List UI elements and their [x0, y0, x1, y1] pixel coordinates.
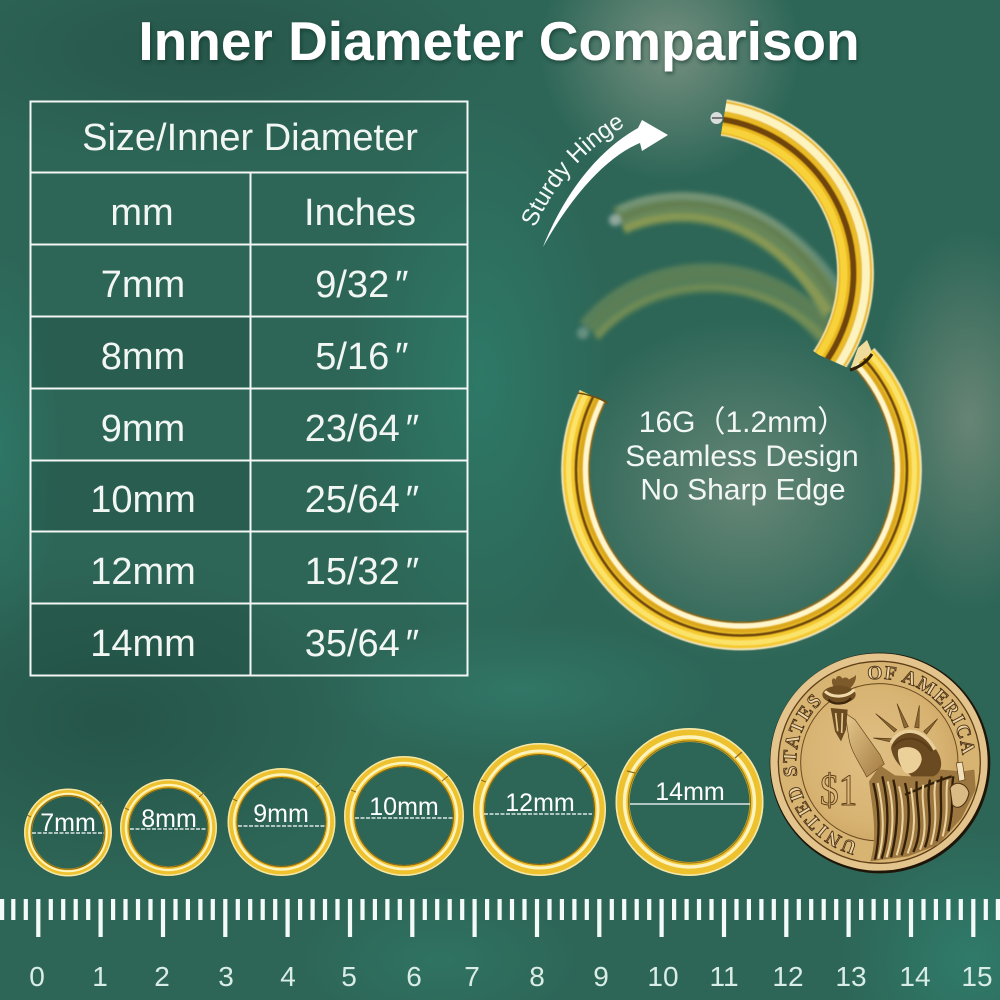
title: Inner Diameter Comparison — [138, 10, 860, 72]
upper hinged arm — [720, 98, 875, 368]
tablet and hand — [950, 762, 969, 807]
table text: 25/64″ — [305, 479, 419, 521]
table text: 5/16″ — [315, 336, 408, 378]
ring 12mm: 12mm — [505, 789, 575, 817]
coin inner field — [801, 684, 958, 841]
table text: 8mm — [101, 336, 185, 378]
table text: 15/32″ — [305, 551, 419, 593]
table text: Size/Inner Diameter — [82, 117, 418, 159]
ruler numbers: 13 — [835, 961, 867, 992]
ruler numbers: 2 — [154, 961, 170, 992]
ring 7mm: 7mm — [40, 809, 96, 837]
hinge joint — [850, 340, 872, 370]
ring 9mm: 9mm — [253, 800, 309, 828]
icon: curved arrow — [543, 120, 668, 247]
ring description: No Sharp Edge — [640, 474, 846, 506]
ruler numbers: 5 — [341, 961, 357, 992]
torch — [822, 675, 856, 741]
lower ring body — [560, 348, 923, 652]
ring 9mm — [228, 769, 335, 875]
size table — [30, 102, 468, 676]
ring 12mm — [474, 744, 605, 875]
table text: 9/32″ — [315, 264, 408, 306]
ring 14mm: 14mm — [655, 778, 725, 806]
coin value: $1 — [820, 766, 857, 815]
table text: Inches — [304, 192, 416, 234]
ruler ticks — [2, 899, 998, 937]
ruler numbers: 6 — [406, 961, 422, 992]
ring 8mm: 8mm — [141, 805, 197, 833]
statue of liberty — [822, 675, 976, 861]
sturdy hinge arrow — [522, 117, 668, 247]
table text: 10mm — [90, 479, 196, 521]
ring 10mm: 10mm — [369, 793, 439, 821]
one dollar coin — [770, 652, 990, 874]
motion ghost arcs — [577, 196, 845, 339]
robes — [869, 765, 976, 861]
large hinged ring — [523, 98, 921, 649]
ghost arc lower — [577, 272, 830, 339]
table text: 14mm — [90, 623, 196, 665]
ruler numbers — [29, 961, 993, 992]
ruler numbers: 4 — [280, 961, 296, 992]
ring description: 16G（1.2mm） — [639, 406, 847, 439]
ruler numbers: 7 — [464, 961, 480, 992]
ring description: Seamless Design — [625, 440, 859, 473]
table text: 35/64″ — [305, 623, 419, 665]
table text: 12mm — [90, 551, 196, 593]
ruler numbers: 9 — [593, 961, 609, 992]
ruler numbers: 3 — [218, 961, 234, 992]
ghost arc upper — [609, 196, 845, 312]
ruler numbers: 0 — [29, 961, 45, 992]
ruler numbers: 14 — [899, 961, 931, 992]
coin lettering — [782, 666, 975, 856]
ring 8mm — [121, 780, 216, 875]
table text: 9mm — [101, 408, 185, 450]
arrow label: Sturdy Hinge — [522, 117, 623, 226]
table text: 23/64″ — [305, 408, 419, 450]
ruler numbers: 1 — [92, 961, 108, 992]
ring 14mm — [616, 729, 763, 875]
lower ring open end — [577, 393, 608, 403]
table text — [82, 117, 419, 665]
head and crown — [891, 732, 941, 776]
table grid — [30, 102, 468, 676]
hinge pin — [710, 112, 724, 124]
coin lettering: UNITED STATES — [782, 694, 856, 856]
ruler numbers: 11 — [709, 961, 739, 992]
ring 7mm — [25, 789, 111, 876]
ruler numbers: 8 — [529, 961, 545, 992]
ruler numbers: 12 — [772, 961, 804, 992]
ring description — [625, 406, 859, 506]
table text: 7mm — [101, 264, 185, 306]
coin lettering: OF AMERICA — [868, 666, 975, 756]
table cell shading — [30, 316, 250, 675]
ring 10mm — [345, 757, 463, 875]
ruler numbers: 15 — [961, 961, 993, 992]
ruler numbers: 10 — [647, 961, 679, 992]
crown rays — [873, 704, 938, 742]
raised arm — [845, 713, 884, 777]
table text: mm — [110, 192, 174, 234]
face — [898, 747, 922, 774]
